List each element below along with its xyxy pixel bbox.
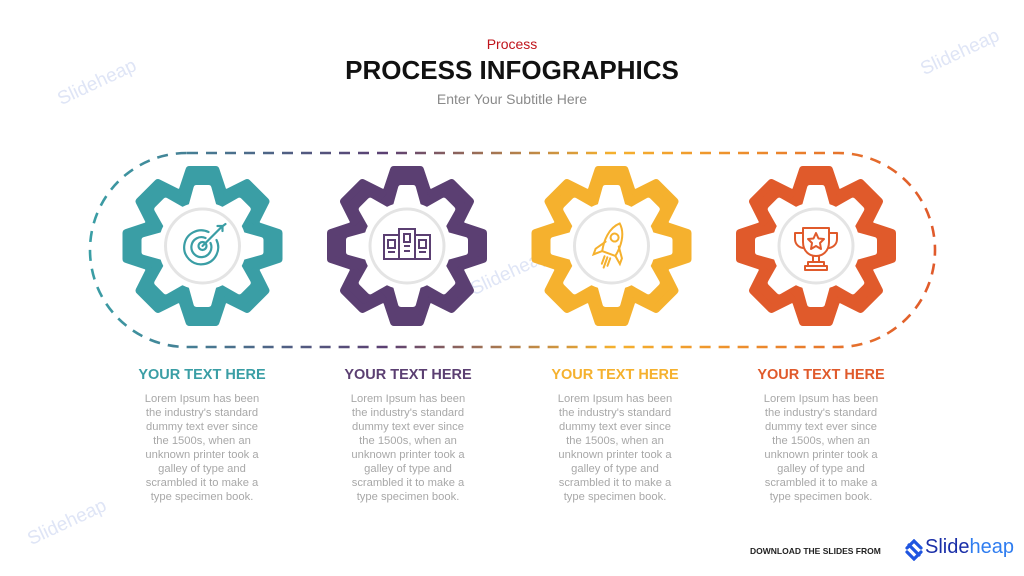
icon: rocket [590, 219, 633, 272]
column 1 text: YOUR TEXT HERE [138, 367, 266, 383]
text: Slideheap [24, 495, 110, 550]
column 4 text: Lorem Ipsum has been the industry's standard dummy text ever since the 1500s, when an unknown printer took a galley of type and scrambled it to make a type specimen book. [764, 393, 878, 503]
footer logo: Slideheap [925, 536, 1014, 558]
gear 1 teal [126, 170, 278, 322]
icon: buildings [384, 229, 430, 259]
gear 4 orange [740, 170, 892, 322]
column 2 text: YOUR TEXT HERE [344, 367, 472, 383]
title: PROCESS INFOGRAPHICS [345, 55, 679, 85]
icon: target [184, 224, 226, 264]
icon: trophy [795, 228, 837, 270]
kicker: Process: Process [487, 36, 537, 52]
text: Slideheap [917, 25, 1003, 80]
column 4 text: YOUR TEXT HERE [757, 367, 885, 383]
column 3 text: YOUR TEXT HERE [551, 367, 679, 383]
column 2 text: Lorem Ipsum has been the industry's standard dummy text ever since the 1500s, when an unknown printer took a galley of type and scrambled it to make a type specimen book. [351, 393, 465, 503]
subtitle: Enter Your Subtitle Here [437, 91, 587, 107]
gear 2 purple [331, 170, 483, 322]
watermark: Slideheap [54, 55, 140, 110]
gear 3 yellow [536, 170, 688, 322]
dashed loop [90, 153, 935, 347]
column 1 text: Lorem Ipsum has been the industry's standard dummy text ever since the 1500s, when an unknown printer took a galley of type and scrambled it to make a type specimen book. [145, 393, 259, 503]
column 3 text: Lorem Ipsum has been the industry's standard dummy text ever since the 1500s, when an unknown printer took a galley of type and scrambled it to make a type specimen book. [558, 393, 672, 503]
text: Slideheap [467, 245, 553, 300]
footer download text: DOWNLOAD THE SLIDES FROM [750, 546, 881, 556]
